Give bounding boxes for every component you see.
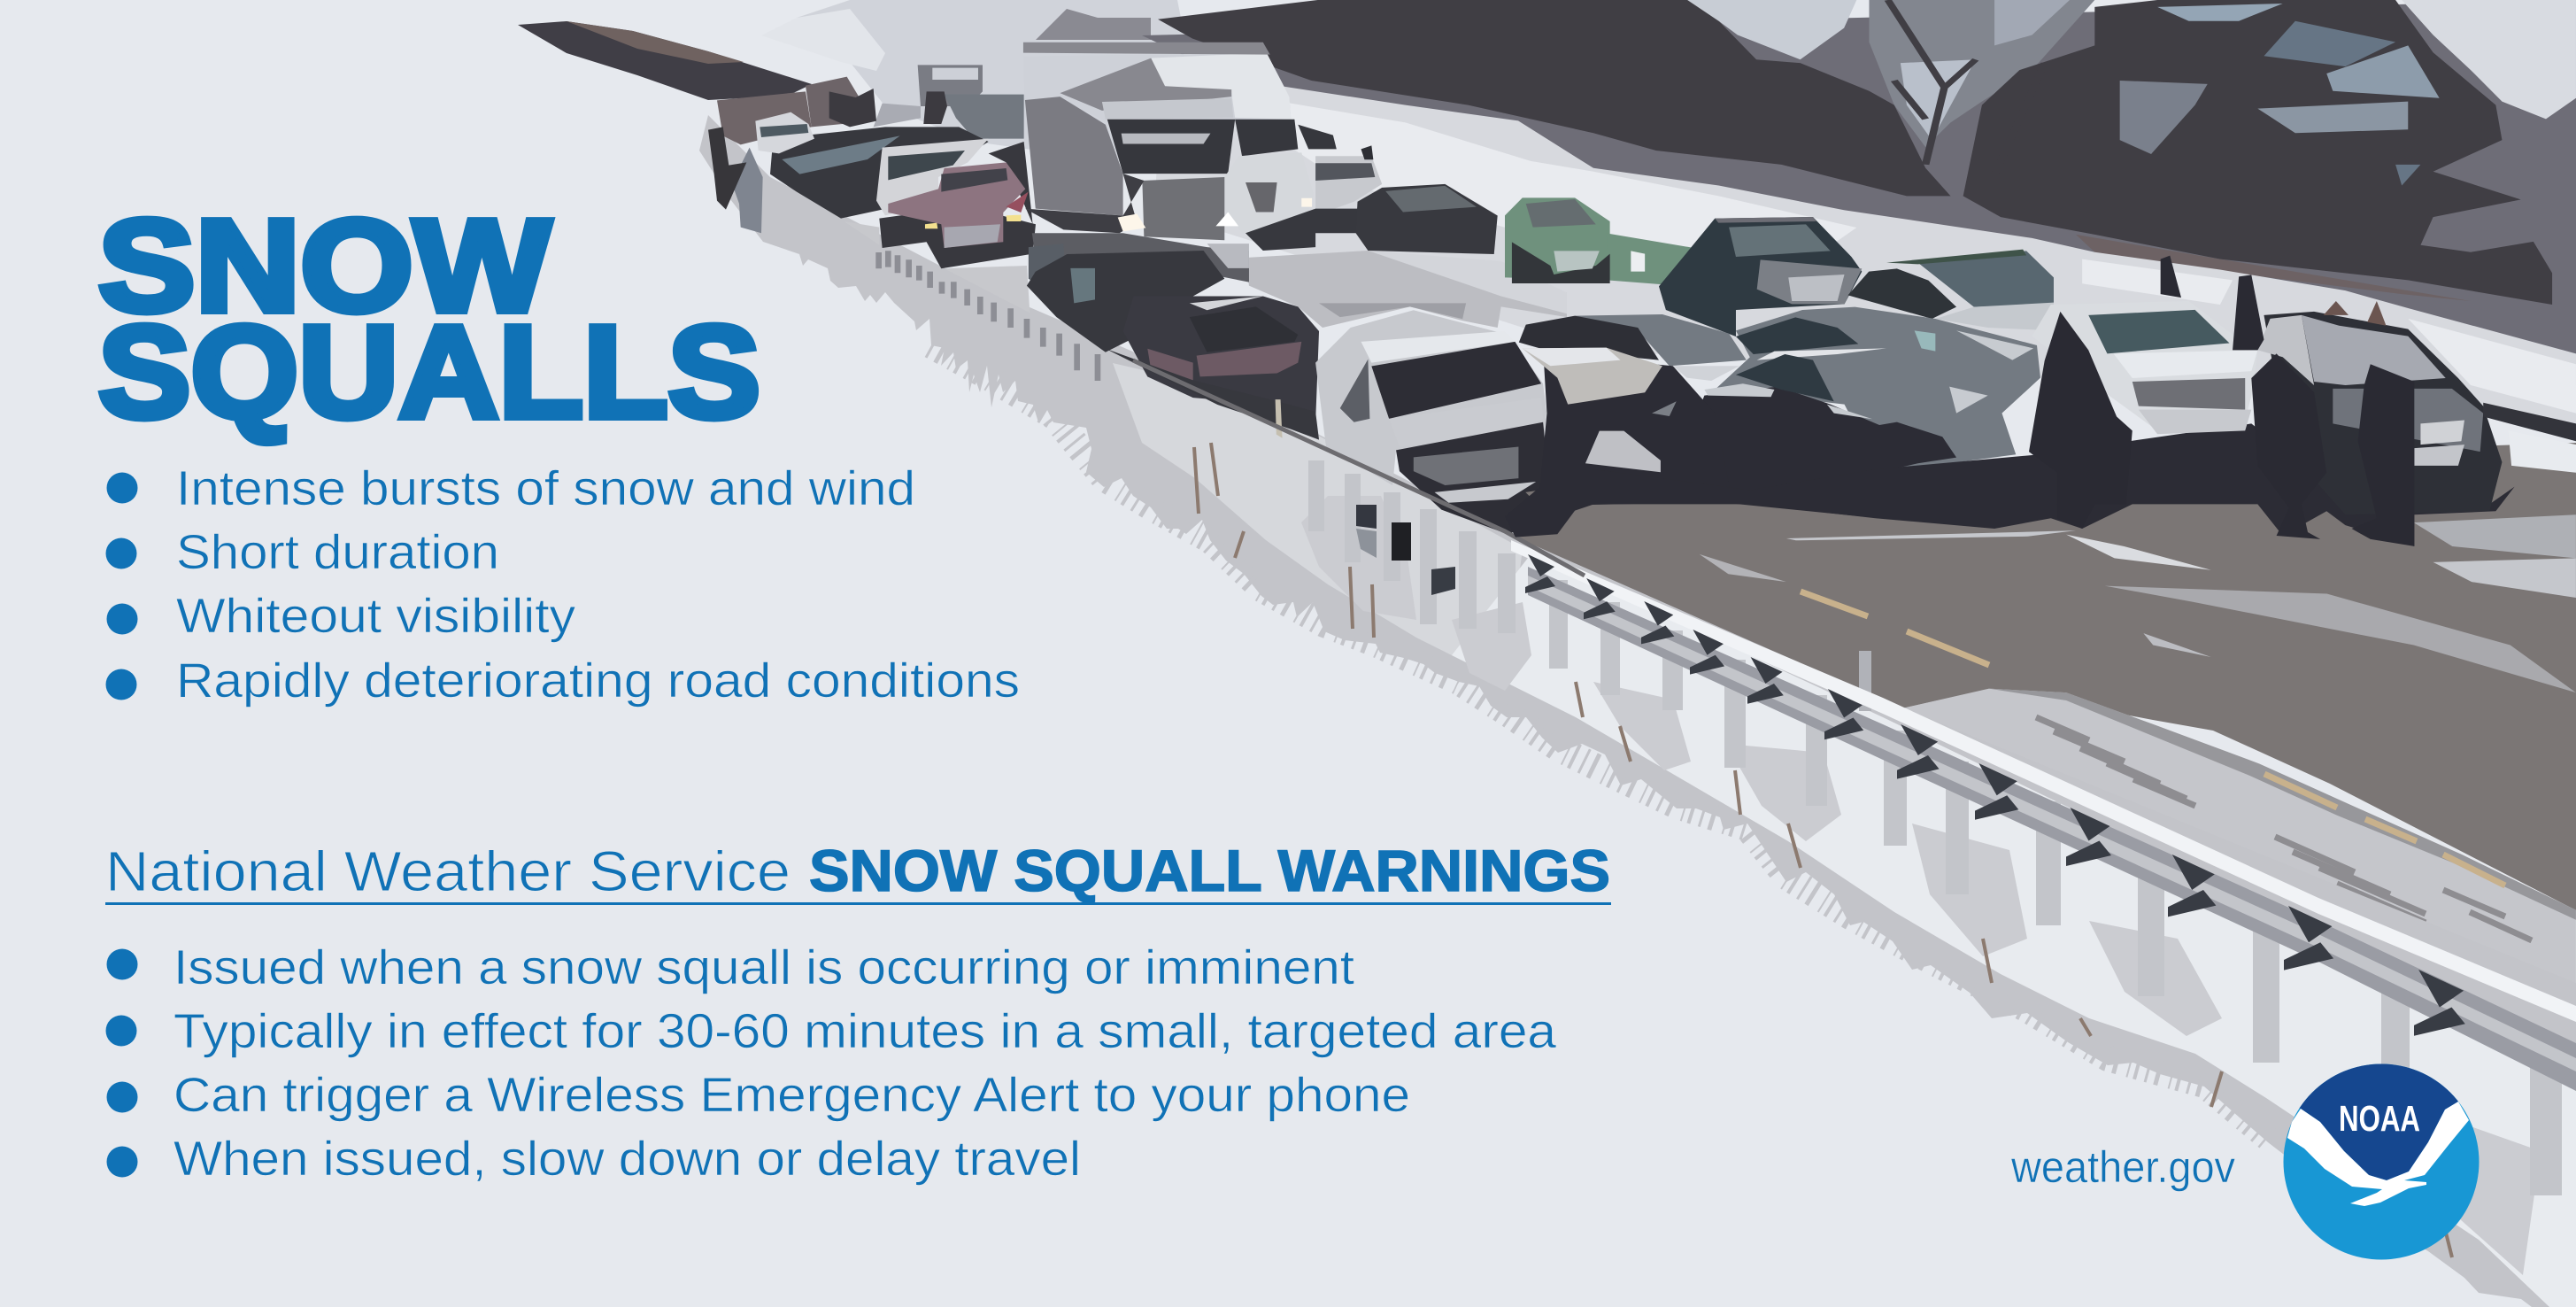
wrecked white hood and dark car [1505,316,1739,537]
list: snow squall characteristics: Rapidly deteriorating road conditions [176,653,1020,708]
shadow under vehicles [1593,423,2515,546]
white vehicle behind truck [1315,145,1382,216]
list: warning facts [106,940,1556,1186]
snow streaks and lane markings on road [1700,514,2576,886]
dark SUV in front of truck [1027,244,1249,352]
heading: National Weather Service Snow Squall Warnings [105,838,1611,905]
background sky [761,0,2576,354]
NOAA logo: NOAA [2339,1098,2420,1139]
NOAA logo [2284,1064,2479,1259]
green car [1505,197,1694,286]
list: warning facts: Typically in effect for 30-60 minutes in a small, targeted area [174,1003,1556,1058]
list: snow squall characteristics: Whiteout visibility [176,588,576,643]
list: snow squall characteristics: Intense bursts of snow and wind [176,460,915,515]
list: snow squall characteristics [106,460,1020,708]
list: snow squall characteristics: Short duration [176,524,499,579]
fringe teeth [931,345,2268,1138]
website label: weather.gov [2010,1142,2235,1192]
illustration: highway pile-up in snow [518,0,2576,1307]
road shoulder with tread marks [1873,689,2576,1017]
brown weeds in fringe [1194,443,2452,1257]
white snow inside embankment [1452,553,2576,1307]
dark pickup [1659,217,1862,336]
list: warning facts: Issued when a snow squall is occurring or imminent [174,940,1354,994]
white van [1315,310,1550,534]
title [98,193,760,445]
grey slope and snow bank behind vehicles [1154,70,2576,427]
semi truck [1023,43,1358,282]
snowy embankment fringe [699,115,2576,1307]
person silhouettes, far left [708,127,763,233]
grey crashed sedan [1575,307,2040,529]
dark sedan [1356,184,1498,254]
dark blue car with windshield [1847,250,2054,330]
treeline [1158,0,2576,305]
distant guardrail right [2483,403,2576,473]
road snow between vehicles [1246,251,1567,328]
heading: National Weather Service Snow Squall Warnings: National Weather Service [105,839,791,903]
list: warning facts: Can trigger a Wireless Emergency Alert to your phone [174,1067,1410,1122]
maroon crashed car [1106,296,1319,440]
guardrail beam [1511,540,2576,1091]
guardrail posts [1308,460,2562,1195]
vehicles, far left cluster [717,65,1036,268]
guardrail top edge [1133,360,1585,576]
jeep [2257,312,2502,514]
people on far bank [2324,301,2386,326]
road surface [1518,443,2576,910]
white pickup [2032,301,2257,434]
people standing in road [2029,256,2414,546]
distant hillside [518,21,812,100]
snow inside embankment, shaded upper part [1113,363,1523,682]
heading: National Weather Service Snow Squall Warnings: SNOW SQUALL WARNINGS [809,838,1610,903]
title: SQUALLS [98,299,760,445]
upper guardrail posts [844,221,1098,381]
snow clumps on embankment [1301,496,2541,1275]
guardrail brackets [1356,505,2465,1036]
list: warning facts: When issued, slow down or delay travel [174,1131,1081,1186]
title: SNOW [98,193,551,339]
